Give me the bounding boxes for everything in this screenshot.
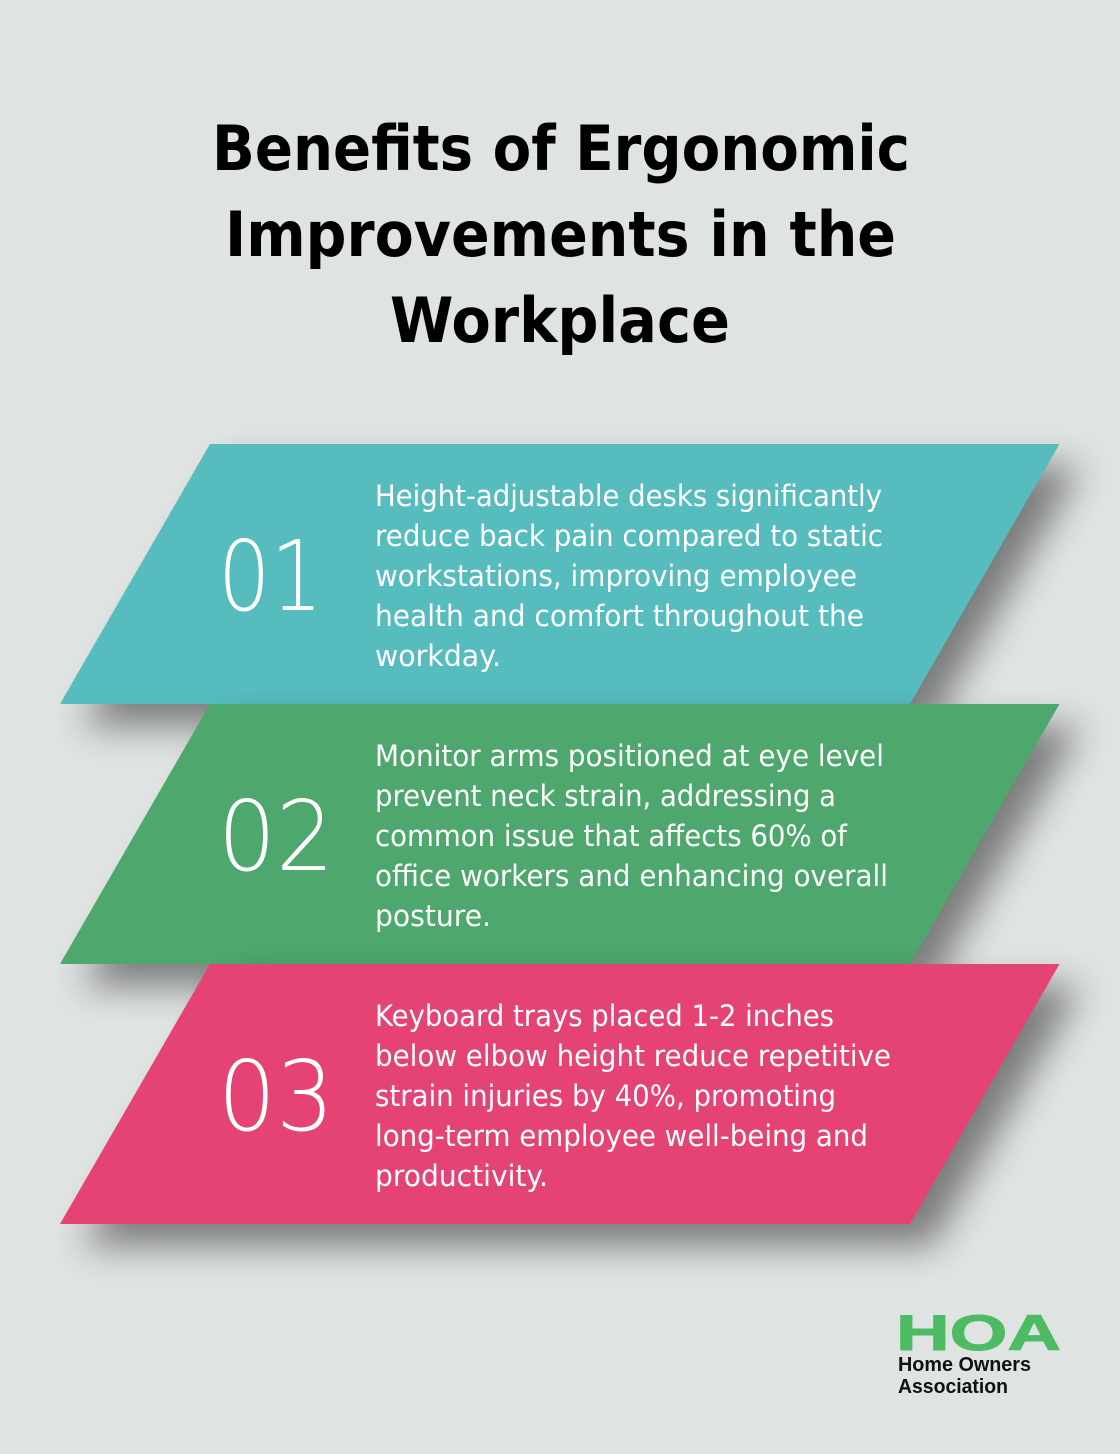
text: step 03 description: strain injuries by 40%, promoting — [375, 1079, 836, 1113]
text: step 03 description — [375, 999, 891, 1193]
text: step 03 description: Keyboard trays placed 1-2 inches — [375, 999, 834, 1033]
logo: HOA Home Owners Association: HOA — [896, 1305, 1061, 1361]
title: Improvements in the — [225, 198, 896, 271]
text: step 03 description: below elbow height reduce repetitive — [375, 1039, 891, 1073]
text: step 01 description: workstations, improving employee — [375, 559, 857, 593]
text: step 02 description — [375, 739, 888, 933]
number 01: 01 — [218, 520, 323, 633]
panel: step 02 — [60, 704, 1081, 986]
text: step 02 description: posture. — [375, 899, 491, 933]
panel: step 03 — [60, 964, 1081, 1246]
logo: HOA Home Owners Association — [896, 1305, 1061, 1398]
text: step 02 description: common issue that affects 60% of — [375, 819, 848, 853]
text: step 02 description: office workers and enhancing overall — [375, 859, 888, 893]
text: step 03 description: long-term employee well-being and — [375, 1119, 868, 1153]
logo: HOA Home Owners Association: Home Owners — [898, 1354, 1031, 1376]
text: step 01 description: health and comfort throughout the — [375, 599, 864, 633]
text: step 03 description: productivity. — [375, 1159, 548, 1193]
text: step 02 description: Monitor arms positioned at eye level — [375, 739, 884, 773]
logo: HOA Home Owners Association: Association — [898, 1376, 1008, 1398]
text: step 01 description — [375, 479, 883, 673]
number 03: 03 — [218, 1040, 334, 1153]
text: step 01 description: workday. — [375, 639, 501, 673]
title: Benefits of Ergonomic — [212, 112, 910, 185]
title — [212, 112, 910, 357]
title: Workplace — [390, 284, 730, 357]
text: step 02 description: prevent neck strain, addressing a — [375, 779, 836, 813]
text: step 01 description: reduce back pain compared to static — [375, 519, 883, 553]
number 02: 02 — [218, 780, 334, 893]
panel: step 01 — [60, 444, 1081, 726]
text: step 01 description: Height-adjustable desks significantly — [375, 479, 882, 513]
